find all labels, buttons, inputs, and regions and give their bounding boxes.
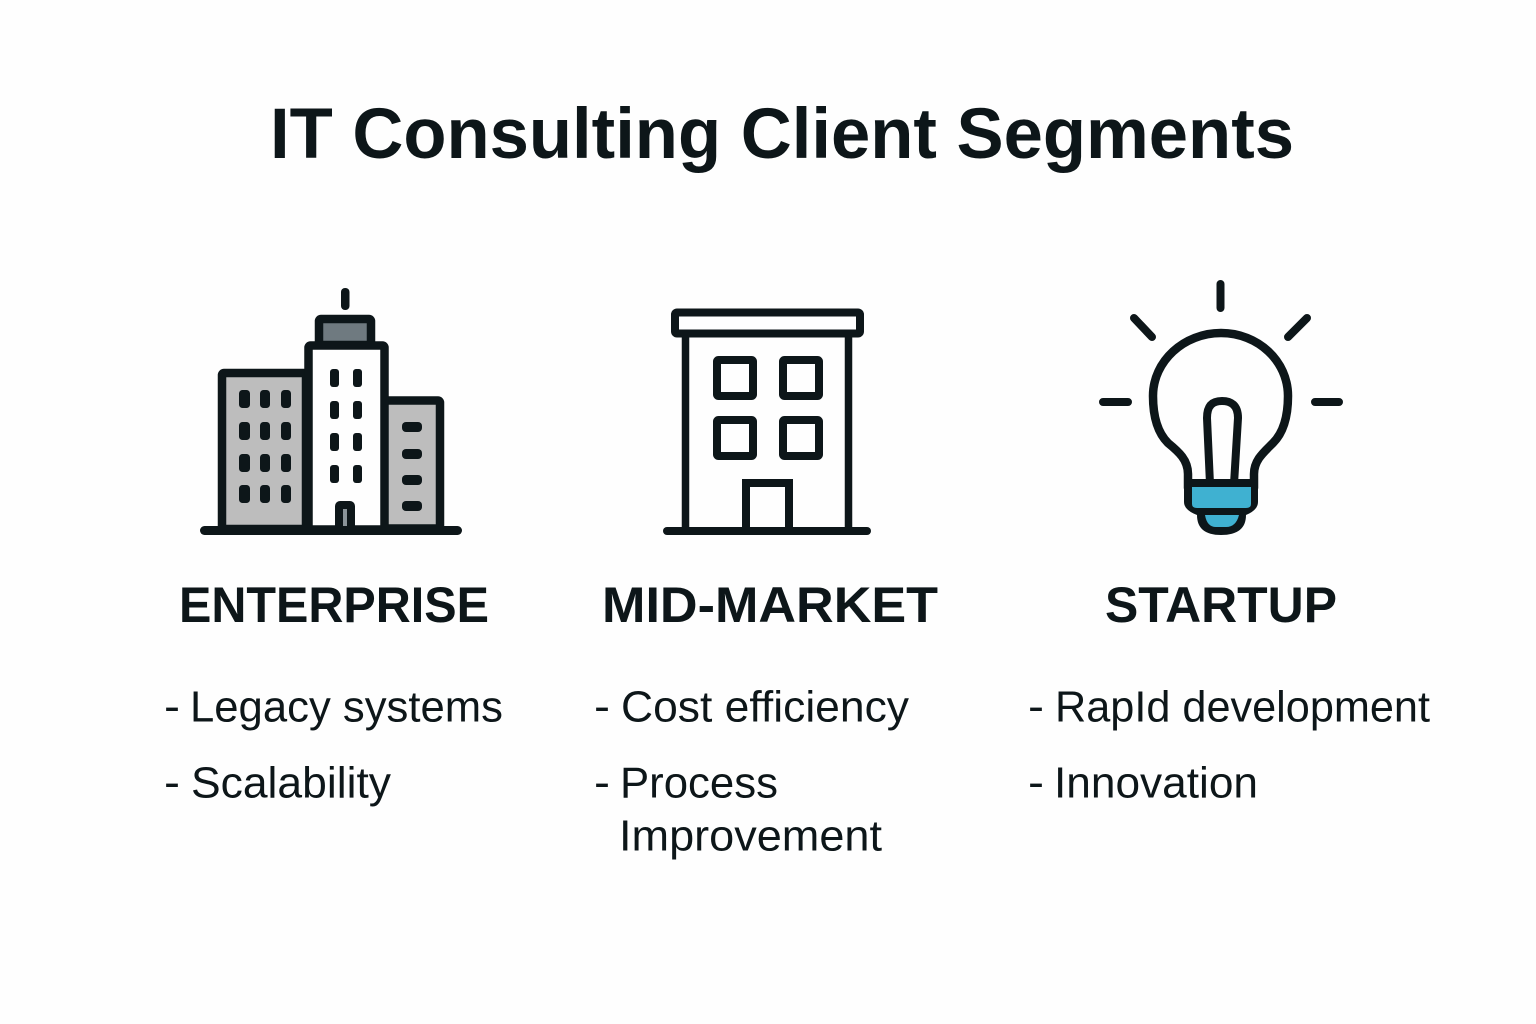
list: mid-market needs: Cost efficiency xyxy=(621,682,909,732)
list: mid-market needs: - xyxy=(594,682,610,731)
heading: enterprise: ENTERPRISE xyxy=(179,577,489,633)
list: enterprise needs xyxy=(164,682,503,808)
panel: enterprise xyxy=(164,288,503,808)
list: startup needs: - xyxy=(1028,758,1044,807)
list: mid-market needs: - xyxy=(594,758,610,807)
panel: mid-market xyxy=(594,312,938,860)
list: enterprise needs: Legacy systems xyxy=(190,682,503,732)
heading: mid-market: MID-MARKET xyxy=(602,577,938,633)
list: startup needs xyxy=(1028,682,1430,808)
panel: startup xyxy=(1028,284,1430,808)
list: mid-market needs: Process xyxy=(620,758,778,808)
list: enterprise needs: - xyxy=(164,758,180,807)
list: startup needs: - xyxy=(1028,682,1044,731)
title: IT Consulting Client Segments xyxy=(270,95,1294,174)
list: mid-market needs xyxy=(594,682,909,860)
list: startup needs: Innovation xyxy=(1054,758,1258,808)
icon: light bulb xyxy=(1103,284,1339,535)
list: enterprise needs: Scalability xyxy=(191,758,391,808)
list: startup needs: RapId development xyxy=(1055,682,1430,732)
icon: office building xyxy=(663,312,871,535)
icon: office towers xyxy=(200,288,462,535)
list: mid-market needs: Improvement xyxy=(619,812,882,860)
list: enterprise needs: - xyxy=(164,682,180,731)
heading: startup: STARTUP xyxy=(1105,577,1337,633)
